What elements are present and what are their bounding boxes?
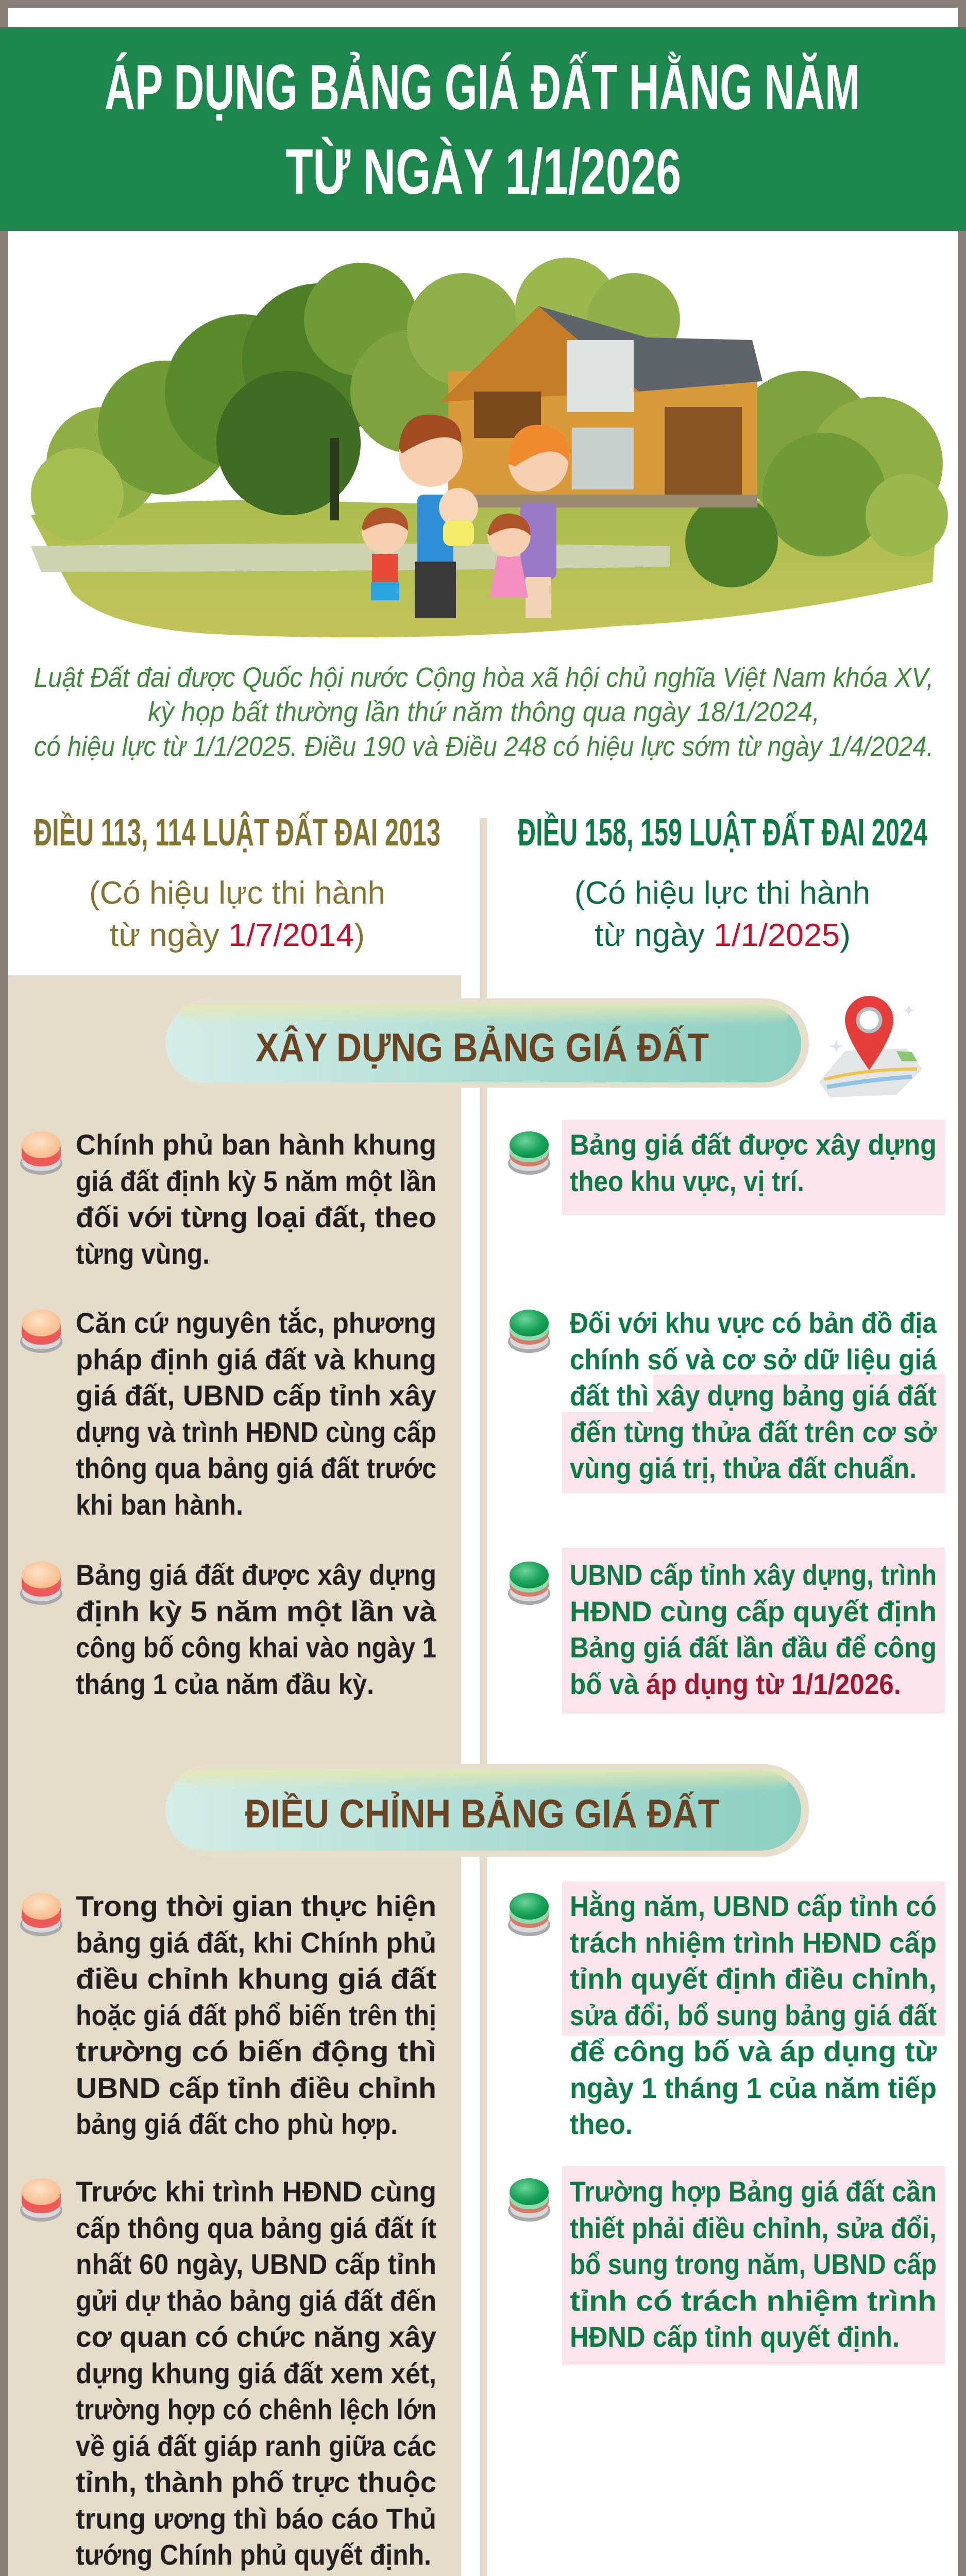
text block 2: nhất 60 ngày, UBND cấp tỉnh — [76, 2248, 436, 2280]
text 1: Bảng giá đất được xây dựng — [570, 1128, 937, 1161]
text block 2 — [76, 2175, 436, 2571]
text block 2: cơ quan có chức năng xây — [76, 2320, 436, 2353]
text 2: đến từng thửa đất trên cơ sở — [570, 1416, 937, 1448]
title banner — [0, 27, 966, 231]
text 3 — [570, 1558, 937, 1700]
text block 1: UBND cấp tỉnh điều chỉnh — [76, 2072, 436, 2104]
text block 1 — [76, 1890, 436, 2140]
highlight box 3 — [562, 1548, 945, 1714]
text 2: chính số và cơ sở dữ liệu giá — [570, 1343, 937, 1376]
text 1: để công bố và áp dụng từ — [570, 2035, 937, 2067]
text 1: theo. — [570, 2108, 633, 2140]
bullet 3 — [20, 1562, 62, 1605]
text 2: HĐND cấp tỉnh quyết định. — [570, 2320, 900, 2353]
bullet 2 — [508, 2178, 550, 2222]
bullet 3 — [508, 1562, 550, 1605]
bullet 2 — [508, 1310, 550, 1353]
text block 2: khi ban hành. — [76, 1488, 243, 1521]
highlight box 1 — [562, 1882, 945, 2036]
text block 1: giá đất định kỳ 5 năm một lần — [76, 1165, 436, 1197]
icon: map pin on map — [819, 996, 922, 1097]
text block 2: về giá đất giáp ranh giữa các — [76, 2430, 436, 2462]
bullet 1 — [508, 1893, 550, 1936]
text block 2: cấp thông qua bảng giá đất ít — [76, 2212, 436, 2244]
text block 2: tướng Chính phủ quyết định. — [76, 2538, 431, 2571]
intro italic text — [34, 662, 934, 762]
text 1: theo khu vực, vị trí. — [570, 1165, 804, 1197]
text 1: ngày 1 tháng 1 của năm tiếp — [570, 2072, 937, 2104]
text block 2: trường hợp có chênh lệch lớn — [76, 2393, 436, 2426]
text block 1: Trong thời gian thực hiện — [76, 1890, 436, 1922]
text 1: tỉnh quyết định điều chỉnh, — [570, 1962, 937, 1995]
text block 1 — [76, 1128, 436, 1270]
section heading: ĐIỀU CHỈNH BẢNG GIÁ ĐẤT: ĐIỀU CHỈNH BẢNG GIÁ ĐẤT — [245, 1791, 719, 1836]
panel: new law - building price table — [508, 1120, 945, 1714]
text 3: HĐND cùng cấp quyết định — [570, 1595, 937, 1628]
text block 1: bảng giá đất cho phù hợp. — [76, 2108, 398, 2140]
text block 2: Trước khi trình HĐND cùng — [76, 2175, 436, 2208]
text 1 — [570, 1128, 937, 1197]
text block 1: bảng giá đất, khi Chính phủ — [76, 1926, 436, 1959]
bullet 1 — [508, 1131, 550, 1175]
highlight box 1 — [562, 1120, 945, 1215]
column header: 2013 law: (Có hiệu lực thi hành — [89, 875, 385, 911]
text 3: bố và áp dụng từ 1/1/2026. — [570, 1668, 901, 1700]
text block 2: pháp định giá đất và khung — [76, 1343, 436, 1376]
text 1: Hằng năm, UBND cấp tỉnh có — [570, 1890, 937, 1922]
text block 2: trung ương thì báo cáo Thủ — [76, 2502, 436, 2535]
text block 1: hoặc giá đất phổ biến trên thị — [76, 1999, 436, 2031]
text block 3: công bố công khai vào ngày 1 — [76, 1631, 436, 1664]
panel: old law - adjustment — [20, 1890, 436, 2571]
column header: 2013 law — [34, 811, 440, 953]
text block 2: Căn cứ nguyên tắc, phương — [76, 1307, 436, 1339]
text block 1: Chính phủ ban hành khung — [76, 1128, 436, 1161]
bullet 1 — [20, 1893, 62, 1936]
text block 3: định kỳ 5 năm một lần và — [76, 1595, 437, 1628]
text block 3 — [76, 1558, 437, 1700]
text block 2: dựng và trình HĐND cùng cấp — [76, 1416, 436, 1448]
text block 2: dựng khung giá đất xem xét, — [76, 2357, 436, 2389]
text block 2: giá đất, UBND cấp tỉnh xây — [76, 1379, 436, 1412]
text 2 — [570, 1307, 937, 1484]
title banner: TỪ NGÀY 1/1/2026 — [285, 137, 681, 208]
section heading: XÂY DỰNG BẢNG GIÁ ĐẤT — [165, 998, 809, 1088]
illustration: family in front of wooden house — [31, 258, 948, 637]
text 1: trách nhiệm trình HĐND cấp — [570, 1926, 937, 1959]
text block 2: thông qua bảng giá đất trước — [76, 1452, 436, 1484]
text 2: đất thì xây dựng bảng giá đất — [570, 1379, 937, 1412]
panel: new law - adjustment — [508, 1882, 945, 2365]
bullet 2 — [20, 2178, 62, 2222]
left panel background and divider stripe — [8, 818, 487, 2576]
text block 2: gửi dự thảo bảng giá đất đến — [76, 2284, 436, 2317]
section heading: ĐIỀU CHỈNH BẢNG GIÁ ĐẤT — [165, 1764, 809, 1857]
text block 1: đối với từng loại đất, theo — [76, 1201, 436, 1233]
text 2: Trường hợp Bảng giá đất cần — [570, 2175, 937, 2208]
text block 2: tỉnh, thành phố trực thuộc — [76, 2466, 436, 2498]
column header: 2024 law — [518, 811, 927, 953]
intro italic text: kỳ họp bất thường lần thứ năm thông qua ngày 18/1/2024, — [148, 697, 820, 727]
text block 1: trường có biến động thì — [76, 2035, 436, 2067]
text block 1: điều chỉnh khung giá đất — [76, 1962, 436, 1995]
text 3: Bảng giá đất lần đầu để công — [570, 1631, 937, 1664]
text block 3: Bảng giá đất được xây dựng — [76, 1558, 436, 1591]
text block 1: từng vùng. — [76, 1238, 210, 1270]
column header: 2024 law: (Có hiệu lực thi hành — [574, 875, 870, 911]
section heading: XÂY DỰNG BẢNG GIÁ ĐẤT: XÂY DỰNG BẢNG GIÁ ĐẤT — [256, 1025, 709, 1070]
panel: old law - building price table — [20, 1128, 437, 1700]
text 2 — [570, 2175, 937, 2353]
text 2: tỉnh có trách nhiệm trình — [570, 2284, 937, 2317]
text block 3: tháng 1 của năm đầu kỳ. — [76, 1668, 374, 1700]
bullet 2 — [20, 1310, 62, 1353]
column header: 2013 law: từ ngày 1/7/2014) — [110, 918, 365, 953]
column header: 2013 law: ĐIỀU 113, 114 LUẬT ĐẤT ĐAI 2013 — [34, 811, 440, 854]
text block 2 — [76, 1307, 436, 1521]
text 1 — [570, 1890, 937, 2140]
column header: 2024 law: từ ngày 1/1/2025) — [595, 918, 851, 953]
highlight box 2 — [562, 1375, 945, 1493]
highlight box 2 — [562, 2166, 945, 2365]
bullet 1 — [20, 1131, 62, 1175]
text 2: vùng giá trị, thửa đất chuẩn. — [570, 1452, 917, 1484]
